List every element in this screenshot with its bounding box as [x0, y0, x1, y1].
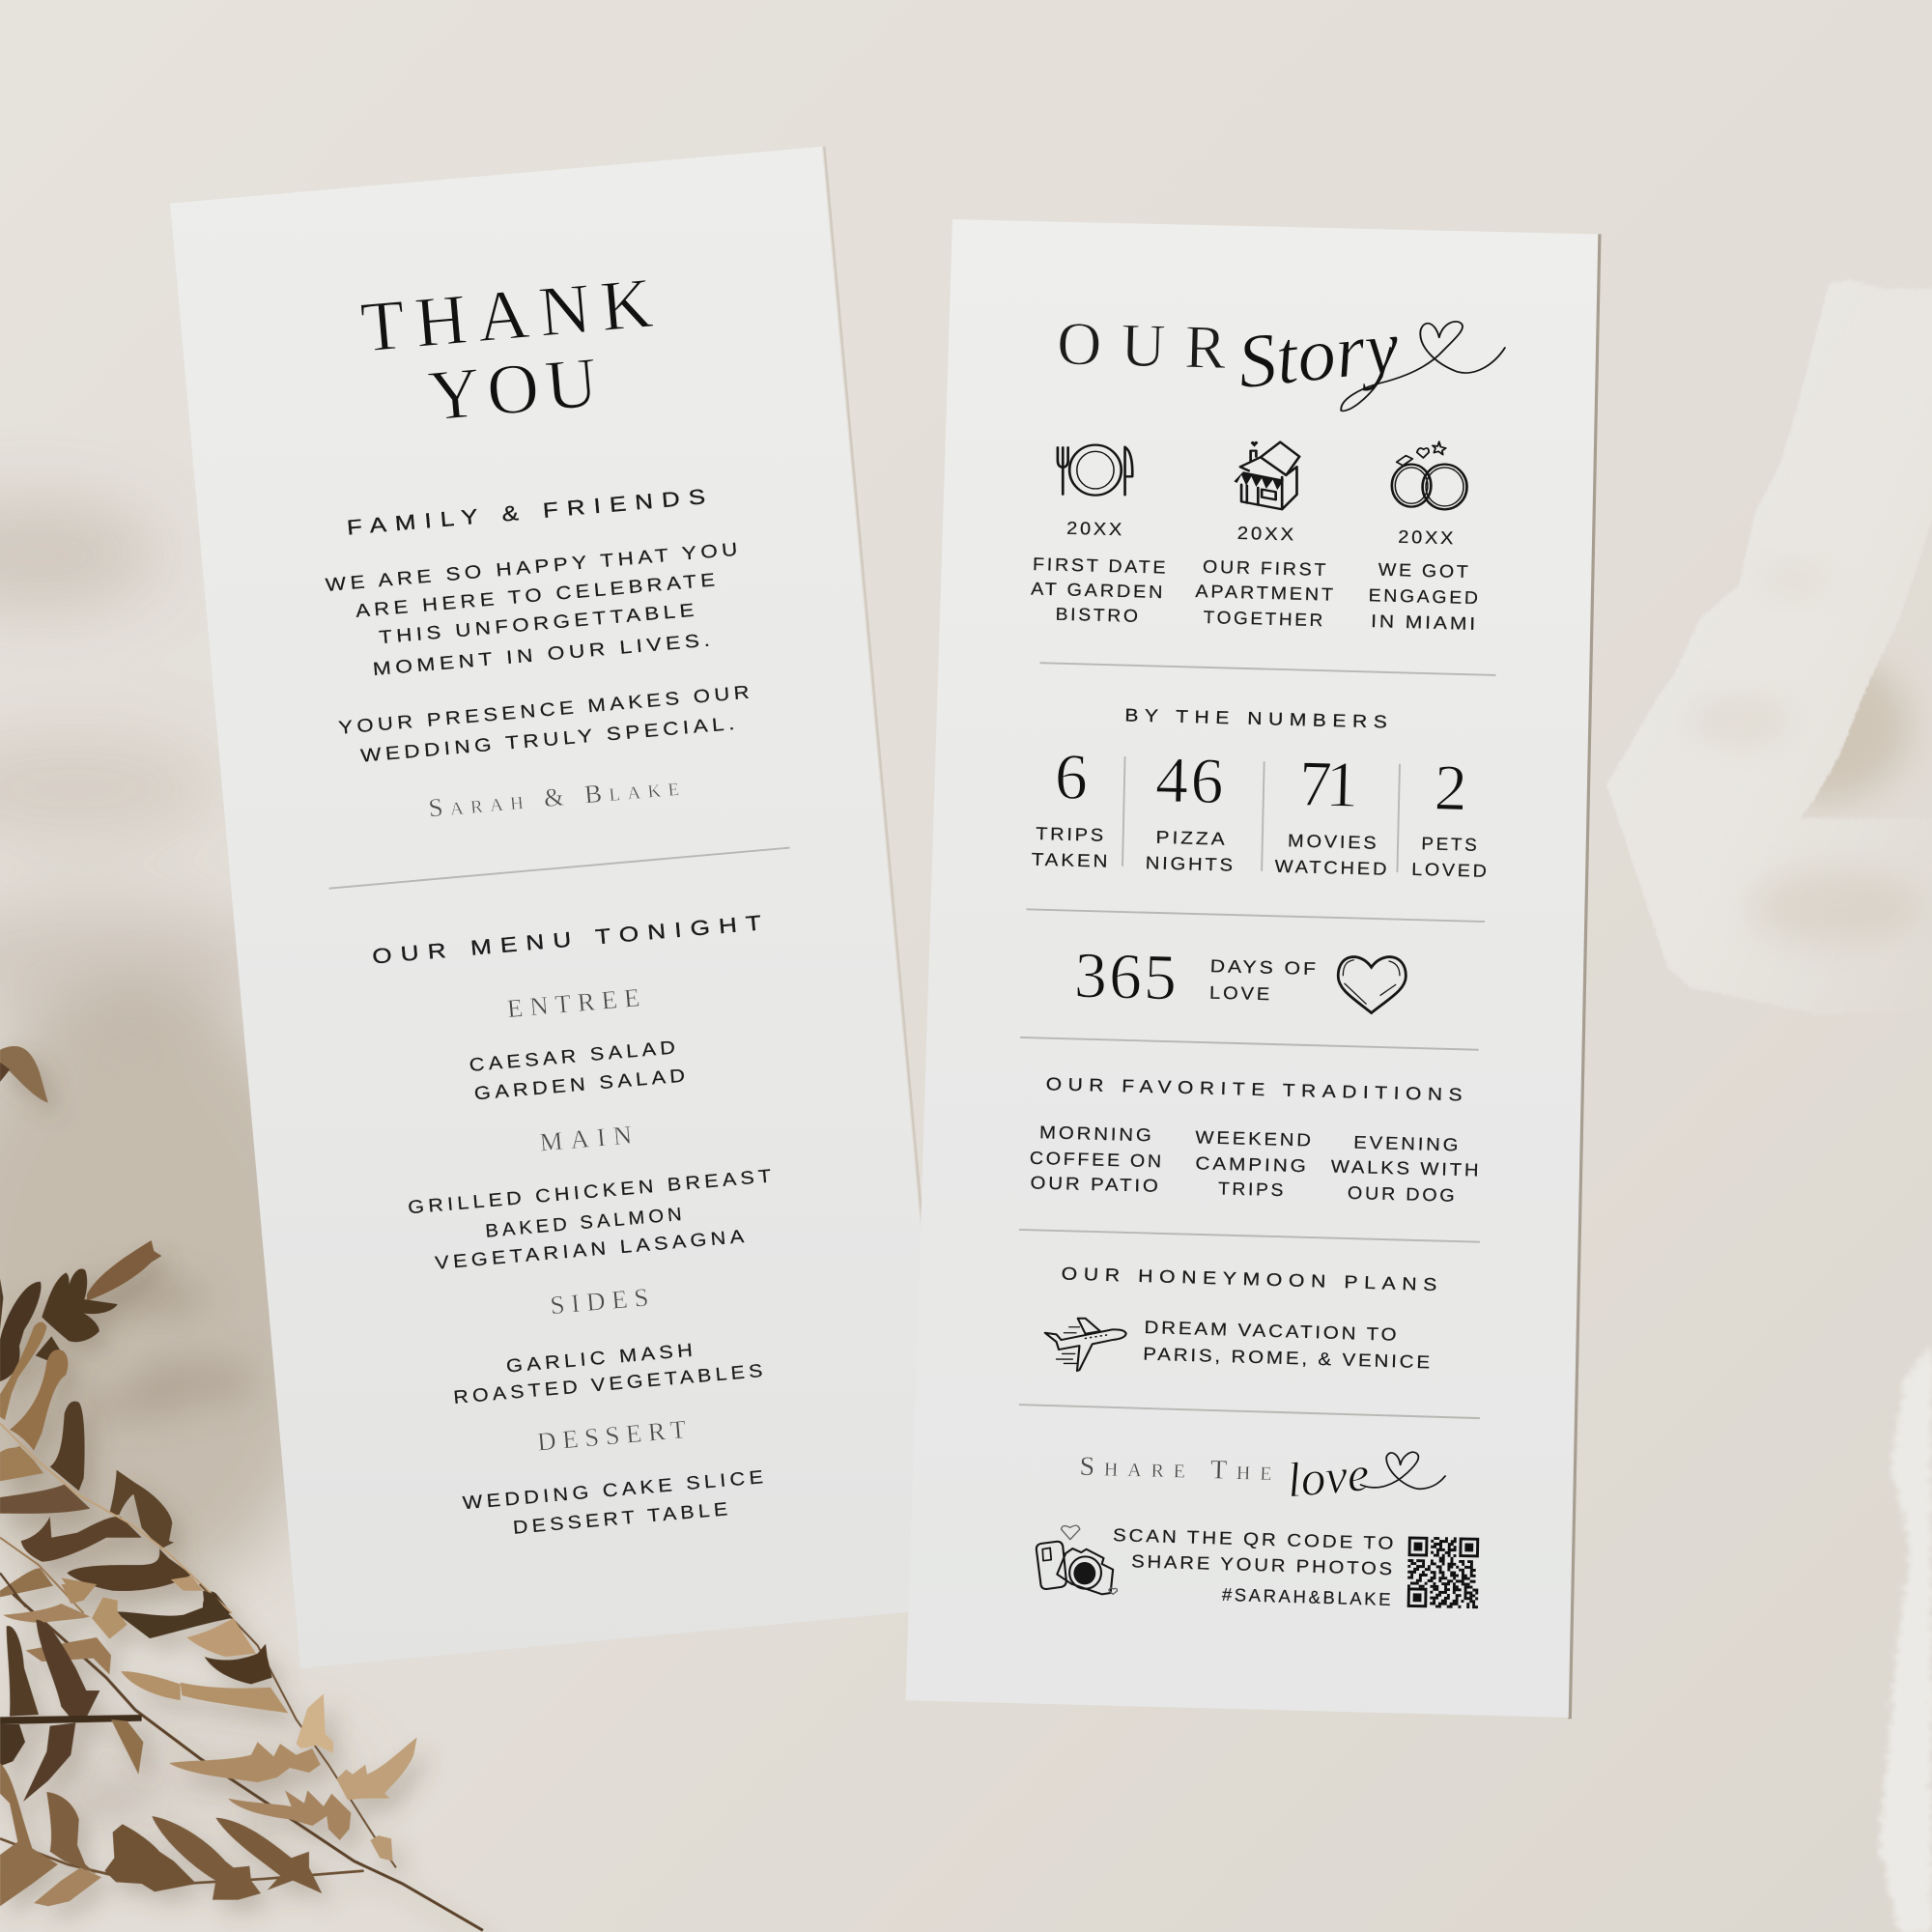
- text block: welcome message: YOUR PRESENCE MAKES OUR: [338, 682, 754, 739]
- timeline: first date: FIRST DATE: [1033, 554, 1169, 578]
- text block: welcome message: MOMENT IN OUR LIVES.: [372, 630, 715, 680]
- tradition: camping trips: [1195, 1126, 1314, 1200]
- timeline: first date: BISTRO: [1055, 604, 1141, 626]
- stat: trips taken: TAKEN: [1032, 849, 1111, 871]
- heading: share the love: love: [1285, 1447, 1372, 1509]
- text block: qr instructions: #SARAH&BLAKE: [1222, 1584, 1393, 1609]
- title: thank you: YOU: [425, 343, 601, 437]
- streak shadows near the fern: [62, 1280, 255, 1814]
- tradition: evening walks: EVENING: [1353, 1132, 1462, 1155]
- stat: movies watched: WATCHED: [1274, 856, 1390, 879]
- title: our story: [1056, 304, 1505, 411]
- menu: main: BAKED SALMON: [485, 1205, 686, 1242]
- tradition: evening walks: WALKS WITH: [1330, 1156, 1482, 1180]
- text block: welcome message: WEDDING TRULY SPECIAL.: [359, 714, 740, 767]
- stat: pizza nights: NIGHTS: [1145, 852, 1236, 875]
- stat: trips taken: 6: [1054, 740, 1089, 813]
- menu: sides: GARLIC MASH: [505, 1340, 697, 1378]
- menu: sides: [453, 1283, 767, 1408]
- stat: pizza nights: [1145, 743, 1236, 875]
- stat: pizza nights: 46: [1154, 743, 1225, 817]
- menu: entree: [469, 982, 690, 1105]
- heading: our favorite traditions: OUR FAVORITE TRADITIONS: [1045, 1073, 1468, 1105]
- tradition: camping trips: CAMPING: [1195, 1152, 1309, 1176]
- title: thank you: [358, 264, 656, 437]
- text block: honeymoon destinations: PARIS, ROME, & VENICE: [1143, 1344, 1433, 1372]
- tradition: morning coffee: OUR PATIO: [1030, 1172, 1161, 1196]
- tradition: camping trips: TRIPS: [1218, 1178, 1286, 1200]
- heading: share the love: Share The: [1079, 1452, 1272, 1487]
- text block: welcome message: ARE HERE TO CELEBRATE: [355, 570, 720, 622]
- timeline: first apartment: 20XX: [1237, 523, 1296, 544]
- menu: dessert: WEDDING CAKE SLICE: [462, 1467, 768, 1514]
- stat: 365 days of love: [1073, 939, 1319, 1014]
- heading: by the numbers: BY THE NUMBERS: [1124, 704, 1394, 732]
- fern branch: [0, 1046, 483, 1930]
- stat: 365 days of love: LOVE: [1209, 982, 1272, 1004]
- tradition: morning coffee: MORNING: [1039, 1122, 1154, 1145]
- panel: thank you card: [170, 147, 957, 1668]
- timeline: engaged: 20XX: [1398, 526, 1456, 548]
- tradition: morning coffee: [1030, 1122, 1164, 1196]
- timeline: first apartment: OUR FIRST: [1203, 556, 1328, 580]
- timeline: first date: 20XX: [1066, 518, 1124, 539]
- tradition: morning coffee: COFFEE ON: [1030, 1148, 1164, 1171]
- heading: our menu tonight: OUR MENU TONIGHT: [371, 910, 771, 969]
- timeline: first date: AT GARDEN: [1031, 579, 1165, 602]
- timeline: first date: [1031, 518, 1169, 626]
- upper fronds: [0, 1240, 232, 1613]
- small leaf tip at left edge: [0, 1046, 48, 1103]
- stat: pets loved: 2: [1434, 752, 1468, 824]
- heading: our honeymoon plans: OUR HONEYMOON PLANS: [1061, 1263, 1443, 1294]
- title: thank you: THANK: [358, 264, 656, 368]
- stat: movies watched: 71: [1298, 747, 1359, 821]
- timeline: engaged: [1368, 526, 1481, 634]
- fabric ribbon: [1606, 280, 1932, 1932]
- stat: movies watched: [1274, 747, 1390, 879]
- menu: dessert: [462, 1414, 768, 1539]
- flourish: small heart swash: [1361, 1452, 1445, 1489]
- icon: place setting: [1058, 445, 1132, 496]
- text block: welcome message: THIS UNFORGETTABLE: [378, 600, 699, 648]
- timeline: first apartment: [1195, 523, 1336, 630]
- stat: pets loved: PETS: [1421, 833, 1480, 855]
- heading: share the love: [1079, 1447, 1445, 1509]
- text block: qr instructions: SCAN THE QR CODE TO: [1113, 1524, 1397, 1553]
- lower fronds: [0, 1584, 483, 1930]
- menu: dessert: DESSERT: [536, 1414, 687, 1457]
- menu: dessert: DESSERT TABLE: [512, 1499, 732, 1539]
- stat: 365 days of love: DAYS OF: [1209, 955, 1319, 979]
- panel: our story card: [906, 219, 1600, 1719]
- soft leaf shadows on the background: [0, 499, 357, 1824]
- heading: family and friends: FAMILY & FRIENDS: [346, 483, 715, 540]
- text block: welcome message: [325, 539, 754, 767]
- text block: qr instructions: [1113, 1524, 1397, 1609]
- title: our story: Story: [1234, 304, 1404, 405]
- menu: main: GRILLED CHICKEN BREAST: [408, 1166, 776, 1218]
- timeline: engaged: WE GOT: [1378, 559, 1471, 582]
- menu: entree: ENTREE: [506, 982, 641, 1023]
- timeline: first apartment: APARTMENT: [1195, 581, 1336, 605]
- timeline: engaged: ENGAGED: [1368, 584, 1481, 608]
- stat: pizza nights: PIZZA: [1155, 827, 1228, 849]
- menu: entree: CAESAR SALAD: [469, 1037, 680, 1076]
- tradition: evening walks: [1330, 1132, 1482, 1206]
- tradition: evening walks: OUR DOG: [1348, 1182, 1458, 1206]
- menu: main: MAIN: [538, 1120, 633, 1157]
- qr code: [1407, 1537, 1479, 1608]
- icon: phone and camera: [1037, 1525, 1117, 1594]
- signature: sarah and blake: Sarah & Blake: [427, 772, 680, 822]
- text block: welcome message: WE ARE SO HAPPY THAT YOU: [325, 539, 743, 596]
- flourish: heart swash: [1341, 322, 1505, 411]
- stat: movies watched: MOVIES: [1288, 830, 1379, 853]
- menu: sides: ROASTED VEGETABLES: [453, 1361, 767, 1408]
- icon: house with awning: [1234, 441, 1299, 509]
- timeline: first apartment: TOGETHER: [1203, 607, 1325, 630]
- text block: qr instructions: SHARE YOUR PHOTOS: [1131, 1550, 1395, 1578]
- text block: honeymoon destinations: DREAM VACATION TO: [1144, 1317, 1400, 1345]
- menu: sides: SIDES: [549, 1283, 650, 1320]
- stat: pets loved: LOVED: [1411, 859, 1490, 881]
- menu: main: VEGETARIAN LASAGNA: [434, 1227, 749, 1274]
- icon: heart: [1338, 957, 1406, 1012]
- icon: airplane: [1045, 1319, 1126, 1371]
- timeline: engaged: IN MIAMI: [1371, 611, 1478, 634]
- text block: honeymoon destinations: [1143, 1317, 1433, 1372]
- icon: engagement rings: [1392, 441, 1466, 509]
- menu: entree: GARDEN SALAD: [473, 1065, 690, 1105]
- stat: trips taken: TRIPS: [1036, 823, 1106, 845]
- stat: 365 days of love: 365: [1073, 939, 1178, 1014]
- stat: pets loved: [1411, 752, 1490, 881]
- menu: main: [408, 1120, 776, 1274]
- stat: trips taken: [1032, 740, 1111, 871]
- title: our story: OUR: [1056, 309, 1227, 382]
- tradition: camping trips: WEEKEND: [1195, 1126, 1314, 1151]
